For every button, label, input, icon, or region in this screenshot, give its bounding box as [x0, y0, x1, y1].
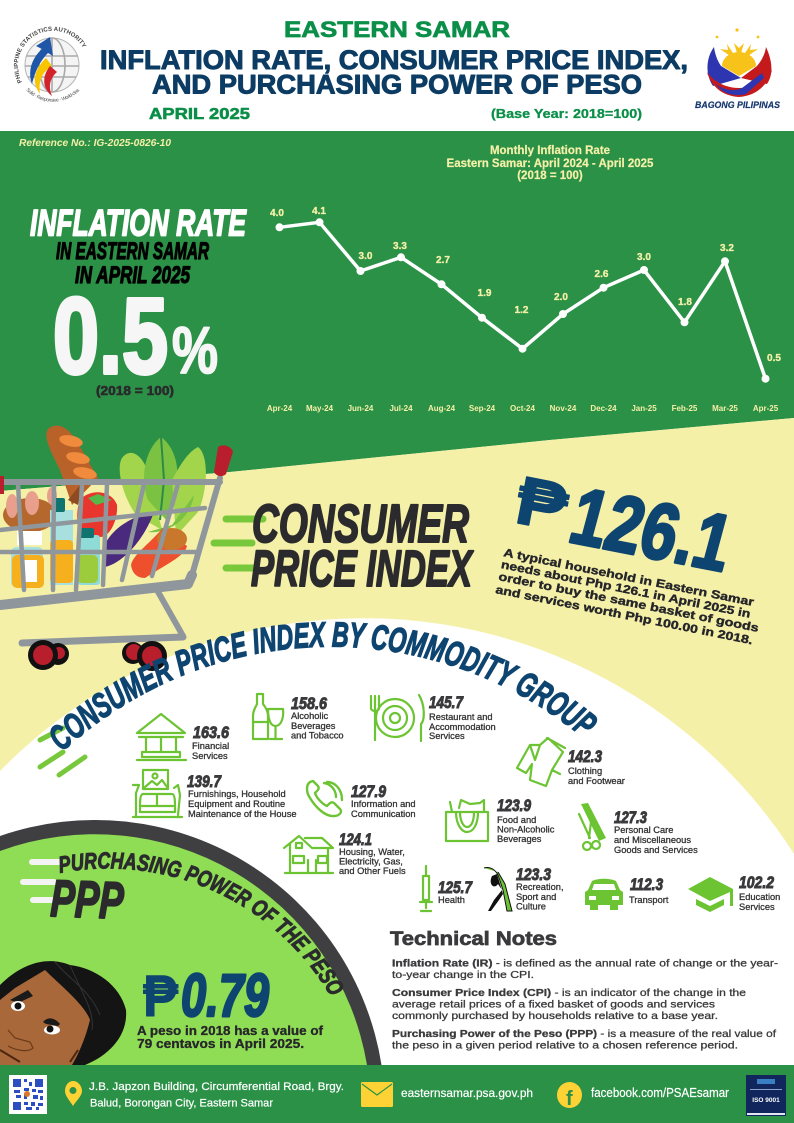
icon: bank: [137, 714, 186, 760]
line chart: monthly inflation rate: 3.3: [393, 241, 407, 252]
item: education services: Services: [739, 902, 775, 912]
line chart: monthly inflation rate: [267, 206, 781, 413]
line chart: monthly inflation rate: 0.5: [767, 353, 781, 364]
QR code: [9, 1075, 47, 1114]
text: technical notes definitions: to-year change in the CPI.: [392, 970, 534, 981]
item: information and communication: 127.9: [351, 782, 386, 801]
text: technical notes definitions: Purchasing Power of the Peso (PPP) - is a measure of the real value of: [392, 1029, 776, 1040]
text: PPP explanation: A peso in 2018 has a value of: [137, 1023, 324, 1038]
header: main title: [100, 45, 688, 100]
base year note: (2018 = 100): [96, 383, 174, 398]
logo: Philippine Statistics Authority: PHILIPPINE STATISTICS AUTHORITY: [14, 26, 86, 84]
item: clothing and footwear: 142.3: [568, 747, 602, 766]
item: alcoholic beverages and tobacco: and Tobacco: [291, 730, 344, 740]
item: health: Health: [438, 895, 465, 905]
line chart: monthly inflation rate: Apr-24: [267, 404, 293, 413]
text: website: easternsamar.psa.gov.ph: [401, 1086, 533, 1100]
text: address: Balud, Borongan City, Eastern Samar: [90, 1098, 273, 1110]
cart wheels: [28, 640, 167, 671]
heading: inflation rate: INFLATION RATE: [30, 202, 247, 244]
icon: comb and scissors: [579, 803, 606, 850]
line chart: monthly inflation rate: 2.7: [436, 255, 450, 266]
item: furnishings and household equipment: Maintenance of the House: [188, 809, 297, 819]
panel: commodity group white arc: [0, 618, 794, 1070]
icon: facebook: [557, 1082, 582, 1110]
chart title: [447, 145, 654, 182]
line chart: monthly inflation rate: 2.0: [554, 292, 568, 303]
item: restaurant and accommodation services: [371, 693, 496, 741]
item: financial services: Services: [192, 751, 228, 761]
item: personal care: [579, 803, 698, 855]
badge: ISO 9001: [746, 1075, 786, 1116]
line chart: monthly inflation rate: 3.0: [637, 252, 651, 263]
item: housing, water, electricity: Housing, Water,: [339, 847, 405, 857]
icon: syringe: [420, 866, 432, 911]
ham: [3, 487, 57, 532]
item: personal care: 127.3: [614, 808, 647, 827]
chart title: Monthly Inflation Rate: [490, 145, 610, 157]
item: restaurant and accommodation services: Accommodation: [429, 722, 496, 732]
item: alcoholic beverages and tobacco: 158.6: [291, 694, 327, 713]
heading: inflation rate: [30, 202, 247, 289]
icon: shirt: [517, 738, 565, 786]
item: transport: 112.3: [630, 875, 663, 894]
item: food and non-alcoholic beverages: Food and: [497, 815, 536, 825]
icon: plate and cutlery: [371, 695, 424, 741]
cart handle: [214, 445, 233, 476]
line chart: monthly inflation rate: 1.9: [478, 288, 492, 299]
item: recreation, sport and culture: Recreation,: [516, 882, 564, 892]
line chart: monthly inflation rate: Jan-25: [631, 404, 657, 413]
line chart: monthly inflation rate: May-24: [306, 404, 334, 413]
line chart: monthly inflation rate: Mar-25: [712, 404, 738, 413]
item: clothing and footwear: and Footwear: [568, 776, 625, 786]
item: clothing and footwear: [517, 738, 625, 786]
header: main title: INFLATION RATE, CONSUMER PRICE INDEX,: [100, 45, 688, 75]
icon: house: [284, 836, 333, 873]
item: alcoholic beverages and tobacco: Alcoholic: [291, 711, 329, 721]
heading: technical notes: Technical Notes: [390, 928, 557, 950]
item: recreation, sport and culture: 123.3: [516, 865, 551, 884]
line chart: monthly inflation rate: Oct-24: [510, 404, 535, 413]
panel: inflation background: [0, 131, 794, 491]
text: CPI explanation: and services worth Php 100.00 in 2018.: [494, 584, 754, 647]
item: food and non-alcoholic beverages: 123.9: [497, 796, 531, 815]
figure: CPI value 126.1: [510, 462, 742, 588]
panel: purchasing power dark ring: [0, 820, 382, 1065]
illustration: shopping cart with groceries: [0, 426, 233, 671]
text: CPI explanation: A typical household in Eastern Samar: [502, 547, 755, 609]
item: recreation, sport and culture: Sport and: [516, 892, 556, 902]
reference number: Reference No.: IG-2025-0826-10: [19, 138, 171, 149]
line chart: monthly inflation rate: Aug-24: [428, 404, 456, 413]
item: food and non-alcoholic beverages: [446, 796, 555, 844]
item: restaurant and accommodation services: Restaurant and: [429, 712, 493, 722]
header: base year: (Base Year: 2018=100): [491, 106, 642, 121]
icon: stretching athlete: [484, 867, 512, 911]
panel: consumer price index background: [0, 418, 794, 900]
item: personal care: and Miscellaneous: [614, 835, 691, 845]
text: technical notes definitions: Consumer Price Index (CPI) - is an indicator of the change in the: [392, 988, 746, 999]
heading: purchasing power of the peso: PURCHASING POWER OF THE PESO: [60, 852, 344, 994]
item: health: 125.7: [438, 878, 473, 897]
item: furnishings and household equipment: [133, 770, 297, 819]
item: furnishings and household equipment: Equipment and Routine: [188, 799, 285, 809]
panel: purchasing power green disc: [0, 834, 367, 1065]
icon: sofa and picture: [133, 770, 182, 817]
footer bar: [0, 1065, 794, 1123]
icon: bottle and glass: [253, 694, 283, 739]
item: financial services: Financial: [192, 741, 229, 751]
item: financial services: [137, 714, 229, 761]
item: personal care: Personal Care: [614, 825, 673, 835]
item: health: [420, 866, 473, 911]
item: recreation, sport and culture: [484, 865, 564, 912]
line chart: monthly inflation rate: 3.2: [720, 243, 734, 254]
item: transport: Transport: [629, 895, 669, 905]
item: education services: [688, 873, 780, 912]
heading: consumer price index: [251, 494, 474, 597]
carrot slices and tomato: [131, 528, 187, 578]
figure: PPP value 0.79: [143, 962, 269, 1029]
item: food and non-alcoholic beverages: Beverages: [497, 834, 542, 844]
heading: inflation rate: IN APRIL 2025: [75, 262, 190, 289]
text: facebook: facebook.com/PSAEsamar: [591, 1086, 729, 1100]
decorative speed lines: CPI: [214, 519, 263, 568]
bell pepper: [77, 492, 117, 537]
icon: phone: [307, 781, 342, 816]
text: address: J.B. Japzon Building, Circumferential Road, Brgy.: [89, 1081, 344, 1093]
decorative speed lines: commodity group: [40, 728, 85, 775]
item: information and communication: Communication: [351, 809, 416, 819]
heading: consumer price index: PRICE INDEX: [251, 540, 474, 597]
heading: inflation rate: IN EASTERN SAMAR: [56, 238, 209, 265]
item: financial services: 163.6: [193, 723, 229, 742]
header: province name: EASTERN SAMAR: [284, 17, 510, 42]
item: housing, water, electricity: Electricity, Gas,: [339, 856, 403, 866]
item: alcoholic beverages and tobacco: [253, 694, 344, 740]
heading: CPI by commodity group: CONSUMER PRICE INDEX BY COMMODITY GROUP: [50, 622, 598, 750]
item: furnishings and household equipment: Furnishings, Household: [188, 789, 286, 799]
item: information and communication: [307, 781, 416, 819]
text: technical notes definitions: commonly purchased by households relative to a base year.: [392, 1011, 718, 1022]
item: education services: 102.2: [739, 873, 774, 892]
headline figure: 0.5%: %: [172, 313, 218, 387]
header: month: APRIL 2025: [149, 106, 250, 123]
figure: PPP value 0.79: 0.79: [181, 962, 269, 1029]
item: transport: [585, 875, 669, 910]
line chart: monthly inflation rate: 1.8: [678, 297, 692, 308]
chart title: (2018 = 100): [517, 170, 583, 182]
item: food and non-alcoholic beverages: Non-Alcoholic: [497, 824, 555, 834]
text: CPI explanation: needs about Php 126.1 in April 2025 in: [500, 559, 751, 621]
chart title: Eastern Samar: April 2024 - April 2025: [447, 158, 654, 170]
item: housing, water, electricity: 124.1: [339, 830, 372, 849]
text: technical notes definitions: Inflation Rate (IR) - is defined as the annual rate of change or the year-: [392, 958, 778, 970]
item: housing, water, electricity: and Other Fuels: [339, 866, 406, 876]
icon: grocery bag: [446, 800, 488, 841]
illustration: portrait: [0, 961, 126, 1065]
figure: CPI value 126.1: 126.1: [562, 470, 742, 588]
line chart: monthly inflation rate: 4.0: [270, 208, 284, 219]
heading: consumer price index: CONSUMER: [252, 494, 469, 554]
logo: Bagong Pilipinas: [695, 28, 780, 110]
header: main title: AND PURCHASING POWER OF PESO: [152, 70, 642, 100]
badge: ISO 9001: ISO 9001: [752, 1097, 780, 1104]
icon: facebook: f: [566, 1088, 573, 1110]
cart frame: [0, 478, 220, 643]
text: PPP explanation: 79 centavos in April 2025.: [137, 1036, 304, 1051]
icon: envelope: [361, 1082, 393, 1107]
line chart: monthly inflation rate: Jul-24: [389, 404, 413, 413]
line chart: monthly inflation rate: Jun-24: [348, 404, 374, 413]
line chart: monthly inflation rate: Sep-24: [469, 404, 496, 413]
jars and bottles: [11, 498, 100, 588]
heading: PPP: PPP: [50, 870, 125, 931]
text: technical notes definitions: [392, 958, 778, 1052]
text: CPI explanation: order to buy the same basket of goods: [497, 571, 760, 635]
text: technical notes definitions: the peso in a given period relative to a chosen reference period.: [392, 1040, 738, 1052]
item: clothing and footwear: Clothing: [568, 766, 602, 776]
item: information and communication: Information and: [351, 799, 416, 809]
line chart: monthly inflation rate: 1.2: [515, 305, 529, 316]
figure: CPI value 126.1: ₱: [510, 462, 574, 546]
decorative speed lines: PPP: [23, 862, 60, 900]
line chart: monthly inflation rate: 2.6: [595, 269, 609, 280]
item: alcoholic beverages and tobacco: Beverages: [291, 721, 336, 731]
line chart: monthly inflation rate: Nov-24: [550, 404, 577, 413]
item: furnishings and household equipment: 139.7: [187, 772, 222, 791]
text: PPP explanation: [137, 1023, 324, 1051]
item: restaurant and accommodation services: 145.7: [429, 693, 464, 712]
headline figure: 0.5%: 0.5: [53, 275, 168, 396]
item: personal care: Goods and Services: [614, 845, 698, 855]
text: technical notes definitions: average retail prices of a fixed basket of goods and services: [392, 1000, 715, 1010]
leafy greens: [120, 437, 206, 536]
text: address: [89, 1081, 344, 1110]
item: recreation, sport and culture: Culture: [516, 902, 546, 912]
eggplant: [102, 512, 154, 567]
item: housing, water, electricity: [284, 830, 406, 876]
bread: [46, 426, 98, 505]
line chart: monthly inflation rate: Dec-24: [590, 404, 617, 413]
icon: graduation cap: [688, 877, 733, 912]
item: education services: Education: [739, 892, 780, 902]
line chart: monthly inflation rate: 3.0: [359, 251, 373, 262]
line chart: monthly inflation rate: 4.1: [312, 206, 326, 217]
line chart: monthly inflation rate: Feb-25: [672, 404, 698, 413]
figure: PPP value 0.79: ₱: [143, 964, 178, 1029]
logo: Bagong Pilipinas: BAGONG PILIPINAS: [695, 100, 780, 110]
item: restaurant and accommodation services: Services: [429, 731, 465, 741]
icon: car: [585, 879, 623, 910]
icon: location pin: [65, 1081, 82, 1106]
text: CPI explanation: [494, 547, 760, 647]
line chart: monthly inflation rate: Apr-25: [753, 404, 779, 413]
